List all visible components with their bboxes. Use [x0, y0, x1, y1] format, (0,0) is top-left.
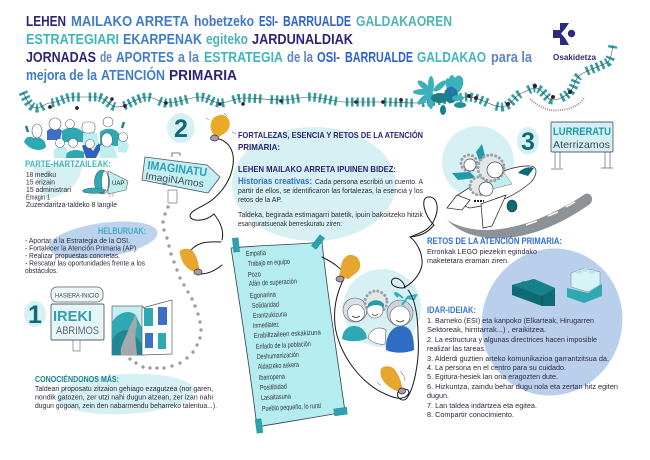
title: OSI-	[317, 50, 340, 66]
title: ESI-	[259, 14, 278, 30]
text: word list: Erabiltzaileen eskakizuna	[254, 328, 321, 340]
text: objectives list: obstáculos.	[25, 268, 58, 275]
sign: Imaginatu: ImagiNAmos	[145, 171, 205, 190]
text: word list: Pozo	[248, 269, 261, 279]
illustration: three faces	[342, 269, 421, 353]
panel: challenges: Erronkak LEGO piezekin egindako	[427, 249, 537, 256]
icon: UAP megaphone: UAP	[112, 181, 124, 187]
text: word list	[246, 248, 321, 413]
panel: objectives	[25, 216, 160, 275]
text: key ideas: IDAR-IDEIAK:	[427, 305, 476, 315]
title: mejora de la	[26, 68, 98, 84]
text: key ideas: 6. Hizkuntza, zaindu behar dugu nola eta zertan hitz egiten	[427, 384, 618, 391]
icon: Osakidetza logo	[553, 23, 597, 62]
text: key ideas: 2. La estructura y algunas directrices hacen imposible	[427, 337, 597, 344]
icon: light bulb right	[336, 255, 360, 282]
sign: Lurreratu Aterrizamos	[551, 122, 613, 169]
text: word list: Egonarina	[250, 290, 276, 300]
plane body	[458, 166, 536, 208]
text: word list: Pueblo pequeño, lo rural	[262, 401, 321, 413]
icon: light bulb left	[180, 242, 222, 275]
garland of leaves	[23, 45, 613, 115]
sign: Ireki Abrimos	[51, 304, 104, 351]
title: ATENCIÓN	[101, 66, 165, 84]
icon: lego bricks	[512, 268, 602, 306]
sign: Imaginatu: IMAGINATU	[147, 158, 208, 179]
title: BARRUALDE	[283, 14, 351, 30]
panel: strengths and stories: Historias creativas:	[238, 176, 312, 186]
text: word list: Positibidad	[260, 382, 287, 392]
text: key ideas: 5. Egitura-hesiek lan ona eragozten dute.	[427, 374, 558, 381]
text: word list: Lasaitasuna	[261, 391, 291, 402]
heading: participants: PARTE-HARTZAILEAK:	[25, 159, 111, 169]
dotted path	[129, 206, 202, 369]
panel: getting to know each other: nondik gatozen, zer utzi nahi dugun atzean, zer izan nahi	[35, 394, 213, 402]
panel: word list paper	[231, 235, 347, 433]
title: ESTRATEGIA	[204, 50, 283, 66]
text: word list: Empatía	[246, 248, 266, 258]
title: APORTES	[116, 50, 174, 66]
title: JARDUNALDIAK	[252, 32, 353, 48]
text: objectives list	[25, 238, 145, 275]
flower	[413, 75, 466, 115]
text: participant list: Zuzendaritza-taldeko 8 langile	[26, 202, 117, 209]
text: participant list: 15 erizain	[26, 180, 55, 186]
text: word list: Enfado de la población	[256, 339, 311, 351]
title: egiteko	[206, 32, 248, 48]
panel: strengths and stories: partir de ellos, se identificaron las fortalezas, la esencia y los	[238, 188, 423, 195]
heading: participants	[25, 159, 117, 209]
title: hobetzeko	[194, 14, 254, 30]
sign: Ireki Abrimos: ABRIMOS	[56, 325, 99, 337]
text: participant list: 15 administrari	[26, 187, 71, 194]
sign: Hasiera Inicio: HASIERA-INICIO	[55, 292, 99, 300]
title: de	[100, 50, 112, 66]
panel: strengths and stories: LEHEN MAILAKO ARRETA IPUINEN BIDEZ:	[238, 164, 396, 174]
text: word list: Solidaridad	[252, 300, 279, 310]
title: GALDAKAO	[417, 50, 486, 66]
icon: light bulb bottom	[377, 366, 406, 394]
icon: light bulb top	[190, 113, 236, 240]
text: key ideas: realizar las tareas.	[427, 346, 486, 353]
panel: strengths and stories: FORTALEZAS, ESENCIA Y RETOS DE LA ATENCIÓN	[238, 129, 423, 140]
text: key ideas: 7. Lan taldea indartzea eta egitea.	[427, 403, 537, 410]
sign: Imaginatu	[142, 153, 220, 203]
text: key ideas	[427, 305, 618, 419]
panel: challenges	[427, 229, 643, 415]
text: word list: Afán de superación	[249, 276, 297, 288]
panel: strengths and stories: retos de la AP.	[238, 197, 282, 204]
text: objectives list: - Rescatar las oportunidades frente a los	[25, 260, 145, 268]
text: objectives list: - Fortalecer la Atención Primaria (AP).	[25, 246, 138, 252]
text: key ideas: dugun.	[427, 393, 449, 400]
title: PRIMARIA	[169, 68, 237, 84]
step number 1	[24, 301, 46, 329]
runway	[447, 194, 592, 238]
text: key ideas: 1. Barneko (ESI) eta kanpoko (Elkarteak, Hirugarren	[427, 318, 594, 325]
sign: Lurreratu Aterrizamos: Aterrizamos	[553, 140, 610, 151]
panel: challenges: maketetara eraman ziren.	[427, 258, 509, 265]
title: para la	[491, 50, 533, 66]
text: word list: Trabajo en equipo	[248, 257, 290, 268]
text: word list: Aldatzeko askera	[258, 360, 299, 371]
panel: challenges: RETOS DE LA ATENCIÓN PRIMARIA:	[427, 235, 562, 246]
text: key ideas: 4. La persona en el centro para su cuidado.	[427, 365, 566, 372]
step number 2	[167, 113, 195, 143]
text: participant list: Emagin 1	[26, 194, 50, 202]
text: word list: Deshumanización	[257, 350, 299, 361]
step number 2: 2	[174, 115, 188, 143]
sign: Hasiera Inicio	[51, 287, 103, 302]
step number 3	[517, 127, 539, 156]
text: word list: Ibarropena	[259, 372, 285, 382]
title: LEHEN	[26, 14, 66, 30]
text: participant list	[26, 172, 117, 209]
sign: Lurreratu Aterrizamos: LURRERATU	[553, 126, 611, 138]
text: word list: Erantzukizuna	[253, 309, 287, 320]
step number 1: 1	[28, 301, 42, 329]
title: a la	[178, 50, 200, 66]
icon: Osakidetza logo: Osakidetza	[553, 53, 597, 62]
title: MAILAKO ARRETA	[71, 14, 189, 30]
text: key ideas: Sektoreak, hirritarrak...) , eraikitzea.	[427, 327, 546, 334]
panel: strengths and stories: Cada persona escribió un cuento. A	[315, 179, 423, 186]
title: JORNADAS	[26, 50, 96, 66]
panel: strengths and stories: esanguratsuenak berreskuratu ziren:	[238, 221, 342, 228]
title: ESTRATEGIARI	[26, 32, 119, 48]
step number 3: 3	[521, 128, 535, 156]
title: de la	[287, 50, 314, 66]
panel: strengths and stories: Taldeka, begirada estimagarri batetik, ipuin bakoitzeko hitzik	[238, 212, 423, 219]
panel: getting to know each other: dugun gogoan, zein den nabarmendu beharreko talentua...).	[35, 403, 217, 410]
connector wires	[322, 197, 437, 400]
sign: Ireki Abrimos: IREKI	[53, 308, 92, 325]
illustration: plane and runway	[442, 126, 592, 238]
icon: UAP megaphone	[83, 170, 128, 197]
panel: getting to know each other	[35, 370, 217, 418]
text: key ideas: 3. Alderdi guztien arteko komunikazioa garrantzitsua da.	[427, 356, 609, 363]
title: BARRUALDE	[345, 50, 413, 66]
text: objectives list: - Realizar propuestas concretas.	[25, 253, 120, 260]
panel: strengths and stories	[232, 127, 423, 241]
panel: getting to know each other: CONOCIÉNDONOS MÁS:	[35, 374, 119, 384]
text: word list: Inmediatez	[253, 320, 279, 330]
panel: strengths and stories: PRIMARIA:	[238, 142, 280, 152]
text: participant list: 18 mediku	[26, 172, 56, 179]
title: EKARPENAK	[123, 32, 202, 48]
passengers	[452, 172, 476, 180]
panel: window and Ireki sign	[24, 287, 172, 355]
title: GALDAKAOREN	[356, 14, 452, 30]
illustration: group of participants	[24, 117, 129, 158]
text: key ideas: 8. Compartir conocimiento.	[427, 412, 514, 419]
title	[26, 14, 533, 84]
panel: objectives: HELBURUAK:	[98, 226, 146, 236]
illustration: open window	[112, 300, 172, 355]
text: objectives list: - Aportar a la Estrategia de la OSI.	[25, 238, 130, 245]
panel: getting to know each other: Taldeari proposatu zitzaion gehiago ezagutzea (nor garen,	[35, 386, 213, 393]
